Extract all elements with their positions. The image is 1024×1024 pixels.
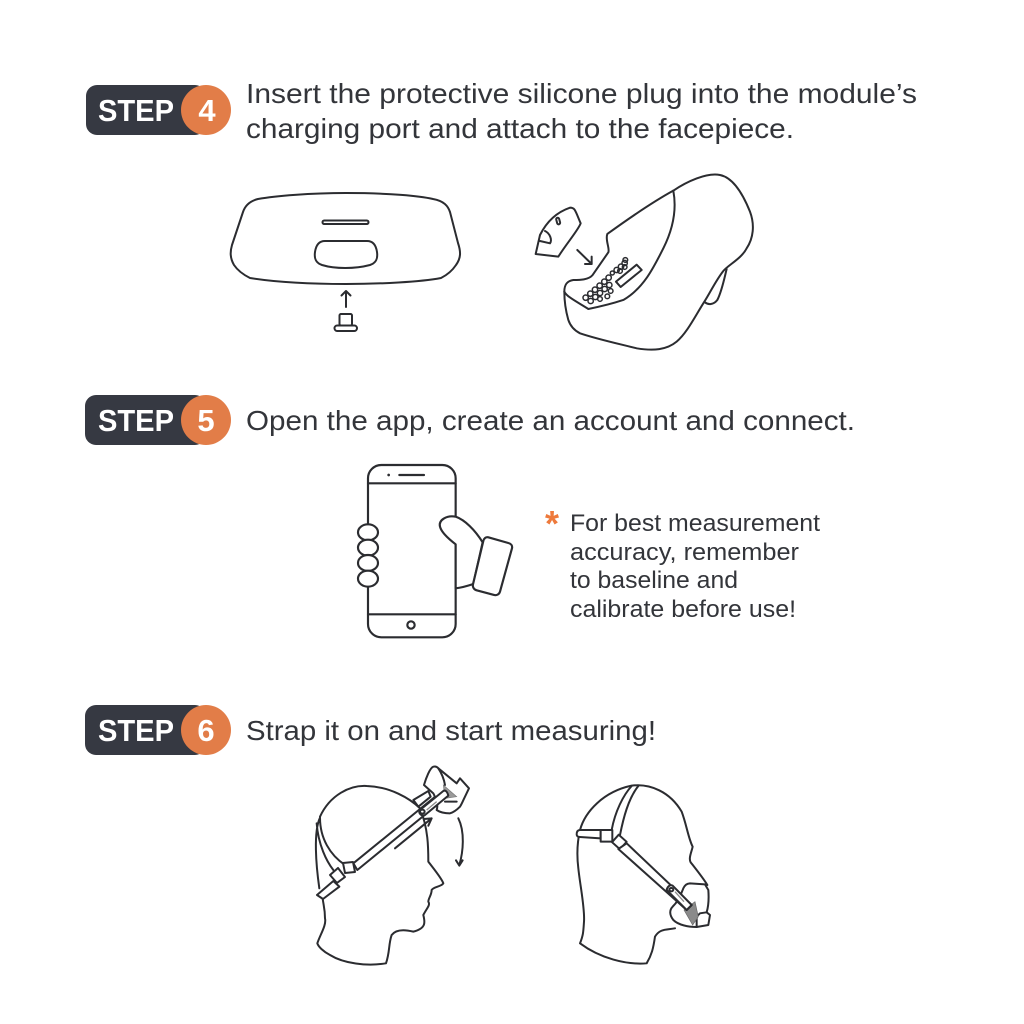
module on strap <box>419 791 448 816</box>
step 4 badge: 4 <box>198 93 216 128</box>
detached module <box>536 208 581 257</box>
icon: silicone plug <box>334 314 357 331</box>
arrow: plug up into port <box>342 291 350 307</box>
illustration: head with mask raised on forehead <box>316 766 469 965</box>
step 5 badge: STEP <box>98 403 174 438</box>
step 6 badge: 6 <box>197 713 215 748</box>
label plate <box>616 265 642 287</box>
step 6 badge: STEP <box>98 713 174 748</box>
arrow: module to facepiece <box>577 250 592 264</box>
illustration: module back with charging port <box>231 193 460 284</box>
strap buckles <box>601 830 627 849</box>
step 4 instruction text: charging port and attach to the facepiece. <box>246 113 794 144</box>
head outline <box>317 786 443 965</box>
step 4 section <box>86 78 917 350</box>
illustration: head wearing mask <box>577 785 710 964</box>
module seat line <box>564 191 675 309</box>
asterisk note <box>545 503 820 623</box>
asterisk note: * <box>545 503 559 544</box>
facepiece outline <box>564 175 753 350</box>
arrow: slide strap over head <box>395 818 432 848</box>
mesh <box>684 902 698 925</box>
step 5 badge: 5 <box>197 403 215 438</box>
thumb <box>440 516 483 588</box>
head outline <box>577 785 707 964</box>
fingers <box>358 524 378 587</box>
illustration: facepiece with module being attached <box>536 175 753 350</box>
mask on face <box>670 883 710 927</box>
mesh <box>443 785 457 798</box>
cuff <box>473 537 512 595</box>
step 4 instruction text: Insert the protective silicone plug into the module’s <box>246 78 917 109</box>
main strap <box>618 843 692 910</box>
vent holes <box>583 258 628 304</box>
rear strap tail <box>317 881 339 899</box>
asterisk note: accuracy, remember <box>570 539 799 566</box>
main strap <box>353 790 448 870</box>
head straps <box>612 786 638 835</box>
module on strap <box>667 885 692 910</box>
asterisk note: calibrate before use! <box>570 596 796 623</box>
step 5 section <box>85 395 855 637</box>
step 6 section <box>85 705 710 965</box>
step 6 badge <box>85 705 231 755</box>
strap buckles <box>330 862 355 883</box>
rear strap <box>316 818 345 888</box>
upper strap <box>413 791 431 807</box>
facepiece strap tab <box>705 269 727 304</box>
illustration: hand holding phone <box>358 465 512 637</box>
step 4 instruction text <box>246 78 917 144</box>
step 4 badge: STEP <box>98 93 174 128</box>
step 5 badge <box>85 395 231 445</box>
asterisk note: to baseline and <box>570 567 738 594</box>
arrow: pull mask down <box>456 818 463 866</box>
step 4 badge <box>86 85 231 135</box>
phone body <box>368 465 456 637</box>
step 5 instruction text: Open the app, create an account and connect. <box>246 405 855 436</box>
step 6 instruction text: Strap it on and start measuring! <box>246 715 656 746</box>
mask on forehead <box>424 766 469 813</box>
asterisk note: For best measurement <box>570 510 820 537</box>
